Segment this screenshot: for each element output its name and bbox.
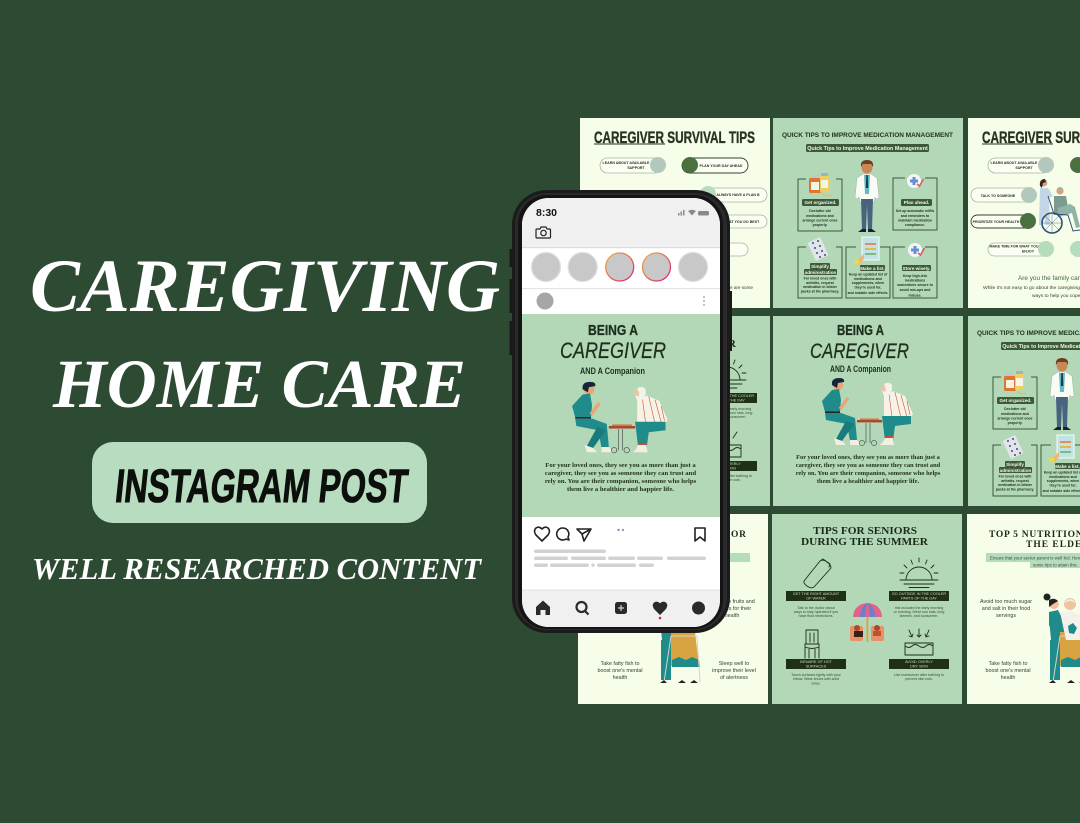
tip: store wisely: medications <box>905 278 925 282</box>
tip: water: have fluid restrictions. <box>799 614 833 618</box>
panel: summer tips, column 1 partial: this includes the early morning <box>703 407 751 411</box>
tip: water: OF WATER <box>806 596 826 600</box>
icon: cake <box>713 431 741 457</box>
post: being a caregiver: rely on. You are their companion, someone who helps <box>545 478 697 485</box>
post: being a caregiver: caregiver, they see you as someone they can trust and <box>545 470 696 477</box>
tip text <box>980 599 1032 681</box>
tip: plan ahead: and reminders to <box>901 214 929 218</box>
intro text <box>983 275 1080 299</box>
tip: hot surfaces: BEWARE OF HOT <box>800 660 833 664</box>
tip: simplify administration: For loved ones with <box>804 276 836 280</box>
tip: store wisely: somewhere secure to <box>897 283 933 287</box>
tip: dry skin <box>889 629 949 681</box>
tip pills: SUPPORT <box>1015 166 1033 170</box>
tip: get organized: arrange current ones <box>997 416 1033 420</box>
body text: caregiver, they see you as someone they can trust and <box>796 462 941 469</box>
panel: nutrition tips, column 1: veggies for their <box>713 606 751 612</box>
tip: simplify administration: Simplify <box>1006 462 1024 467</box>
tip: water: GET THE RIGHT AMOUNT <box>793 592 840 596</box>
tip pills: PRIORITIZE YOUR HEALTH <box>973 220 1020 224</box>
tip pills: LEARN ABOUT AVAILABLE <box>991 161 1038 165</box>
tip: plan ahead: maintain medication <box>898 218 932 222</box>
tip: get organized: medications and <box>1001 412 1029 416</box>
tip: simplify administration: arthritis, request <box>806 281 835 285</box>
panel: summer tips, column 1 partial: Use moisturizer after bathing to <box>702 474 752 478</box>
tip: simplify administration <box>798 237 842 298</box>
panel heading: QUICK TIPS TO IMPROVE MEDICATION MANAGEMENT <box>782 132 954 139</box>
subheading pill: Quick Tips to Improve Medication Management <box>807 146 928 152</box>
illustration: caregiver and elder <box>822 378 913 446</box>
panel: summer tips, column 1 partial: DURING THE SUMMER <box>609 338 736 350</box>
phone side buttons <box>510 249 732 355</box>
tip: hot surfaces: Touch surfaces lightly with your <box>791 673 842 677</box>
tip: hot surfaces: soles. <box>811 682 821 686</box>
tip: make a list <box>846 237 890 298</box>
tip: get organized: properly. <box>813 223 827 227</box>
tip: sun: this includes the early morning <box>895 606 943 610</box>
panel: summer tips, column 1 partial: PARTS OF THE DAY <box>709 398 745 402</box>
tip: store wisely <box>893 243 937 298</box>
tip pills: ENJOY <box>1022 250 1035 254</box>
phone <box>510 190 732 633</box>
tip: hot surfaces <box>786 630 846 686</box>
panel: nutrition tips, column 1: Take fatty fish to <box>601 661 639 667</box>
tip: hot surfaces: elbow. Wear shoes with solid <box>793 677 839 681</box>
tip: make a list: they're used for, <box>855 285 881 289</box>
icon: doctor <box>855 160 879 232</box>
tip: store wisely: avoid mix-ups and <box>900 288 930 292</box>
post: being a caregiver: BEING A <box>588 322 638 339</box>
tip: sun: GO OUTSIDE IN THE COOLER <box>892 592 946 596</box>
tip: get organized: Get organized. <box>1000 398 1031 403</box>
tip: simplify administration: packs at the pharmacy. <box>801 290 839 294</box>
status and top bar: 8:30 <box>536 207 557 219</box>
illustration: couple under umbrella <box>850 603 884 642</box>
panel: summer tips, column 1 partial: GO OUTSIDE IN THE COOLER <box>700 394 754 398</box>
panel: being a caregiver: CAREGIVER <box>810 340 909 363</box>
panel: caregiver survival tips, column 1: LEARN ABOUT AVAILABLE <box>603 161 650 165</box>
post: being a caregiver: CAREGIVER <box>560 338 666 363</box>
tip: store wisely: misuse. <box>908 294 922 298</box>
tip: dry skin: prevent skin cuts. <box>905 677 933 681</box>
panel: caregiver survival tips, column 3 <box>968 118 1080 308</box>
panel heading: DURING THE SUMMER <box>801 536 928 548</box>
bottom navigation <box>522 590 720 627</box>
tip: sun: or evening. Wear sun hats, long <box>894 610 944 614</box>
tip: sun: sleeves, and sunscreen. <box>900 614 938 618</box>
tip pills <box>971 157 1080 257</box>
panel: nutrition tips, column 1: Ensure that your senior parent is well fed. Here are <box>623 556 723 560</box>
panel: medication tips, column 3 <box>968 316 1080 506</box>
badge: instagram post: INSTAGRAM POST <box>113 459 411 512</box>
panel: summer tips, column 1 partial: AVOID OVERLY <box>713 462 741 466</box>
panel: summer tips, column 1 partial: prevent skin cuts. <box>713 478 741 482</box>
panel: being a caregiver <box>773 316 963 506</box>
tip: sun <box>889 558 949 618</box>
subtitle: WELL RESEARCHED CONTENT <box>32 552 482 586</box>
tip: make a list: Make a list. <box>860 266 885 271</box>
panel: summer tips, column 1 partial: DRY SKIN <box>718 466 736 470</box>
panel heading: BEING A <box>837 323 884 339</box>
body text: For your loved ones, they see you as more than just a <box>796 454 941 461</box>
tip: water: Talk to the doctor about <box>797 606 835 610</box>
illustration: nurse with walker <box>660 614 700 683</box>
tip: simplify administration: medication in blister <box>803 285 838 289</box>
tip: simplify administration: medication in blister <box>998 483 1033 487</box>
panel: caregiver survival tips, column 1: DO WHAT YOU DO BEST <box>717 220 760 224</box>
tip: get organized: medications and <box>806 214 834 218</box>
post: being a caregiver <box>522 314 720 517</box>
tip: store wisely: Store wisely. <box>903 266 930 271</box>
tip text: Avoid too much sugar <box>980 599 1032 605</box>
badge: instagram post <box>92 442 427 523</box>
tip: water <box>786 559 846 618</box>
panel: caregiver survival tips, column 1 <box>580 118 770 308</box>
panel heading <box>801 525 928 548</box>
post: being a caregiver: AND A Companion <box>580 366 645 377</box>
tip: store wisely: Keep high-risk <box>903 274 927 278</box>
phone screen <box>522 198 720 627</box>
panel heading: CAREGIVER SURVIVAL TIPS <box>594 128 755 147</box>
icon: camera <box>536 227 550 238</box>
tip: make a list: supplements, when <box>852 281 884 285</box>
post: being a caregiver: them live a healthier and happier life. <box>567 486 674 493</box>
tip: get organized: Declutter old <box>809 209 831 213</box>
panel: nutrition tips, column 1: health <box>725 613 739 619</box>
tip: dry skin: Use moisturizer after bathing to <box>894 673 944 677</box>
tip: make a list: they're used for, <box>1050 483 1076 487</box>
tip: water: ways to stay hydrated if you <box>794 610 838 614</box>
tip: simplify administration <box>993 435 1037 496</box>
tip: dry skin: AVOID OVERLY <box>905 660 933 664</box>
panel: nutrition tips, column 1: boost one's mental <box>597 668 643 674</box>
tip: plan ahead <box>893 174 937 230</box>
phone frame <box>512 190 730 633</box>
tip text: boost one's mental <box>985 668 1031 674</box>
panel heading <box>989 530 1080 550</box>
tip pills: TALK TO SOMEONE <box>981 194 1016 198</box>
panel: being a caregiver: AND A Companion <box>830 364 891 374</box>
panel: summer tips, column 1 partial: or evening. Wear sun hats, long <box>702 411 752 415</box>
tip: get organized <box>993 371 1037 429</box>
panel: caregiver survival tips, column 1: ALWAYS HAVE A PLAN B <box>716 193 760 197</box>
tip: simplify administration: For loved ones with <box>999 474 1031 478</box>
caption placeholder bars <box>534 550 706 567</box>
tip text: servings <box>996 613 1016 619</box>
tip: get organized: properly. <box>1008 421 1022 425</box>
tip: get organized: Get organized. <box>805 200 836 205</box>
panel: tips for seniors <box>772 514 962 704</box>
illustration: nurse and wheelchair <box>1039 179 1080 233</box>
panel: nutrition tips, column 1 <box>578 514 768 704</box>
body text: rely on. You are their companion, someone who helps <box>796 470 941 477</box>
tip: simplify administration: administration <box>1000 468 1032 473</box>
tip: simplify administration: packs at the pharmacy. <box>996 488 1034 492</box>
post action icons <box>534 527 705 541</box>
tip: sun: PARTS OF THE DAY <box>901 596 937 600</box>
icon: sun <box>708 358 746 388</box>
tip: make a list: and notable side effects. <box>848 291 888 295</box>
panel: nutrition tips, column 1: Sleep well to <box>719 661 749 667</box>
tip: get organized <box>798 173 842 231</box>
panel: summer tips, column 1 partial: sleeves, and sunscreen. <box>708 415 746 419</box>
panel: nutrition tips, column 1: improve their level <box>712 668 756 674</box>
tip: get organized: arrange current ones <box>802 218 838 222</box>
post: being a caregiver: For your loved ones, they see you as more than just a <box>545 462 696 469</box>
tip: hot surfaces: SURFACES <box>806 664 827 668</box>
tip: simplify administration: arthritis, request <box>1001 479 1030 483</box>
intro band: some tips to attain this. <box>1033 562 1078 568</box>
icon: doctor <box>1050 358 1074 430</box>
panel heading: TIPS FOR SENIORS <box>813 525 917 537</box>
tip: make a list: supplements, when <box>1047 479 1079 483</box>
panel: summer tips, column 1 partial <box>580 316 770 506</box>
panel: caregiver survival tips, column 1: SUPPORT <box>627 166 645 170</box>
tip: plan ahead: compliance. <box>905 223 925 227</box>
tip: plan ahead: Set up automatic refills <box>896 209 934 213</box>
panel: nutrition tips, column 1: health <box>613 675 627 681</box>
body text <box>796 454 941 485</box>
panel: nutrition tips, column 1: Eat more fruits and <box>709 599 755 605</box>
tip: make a list: medications and <box>854 277 882 281</box>
post header <box>536 292 705 310</box>
panel: medication tips <box>773 118 963 308</box>
panel: nutrition tips, column 3 <box>967 514 1080 704</box>
panel: nutrition tips, column 1: TOP 5 NUTRITION TIPS FOR <box>600 530 747 540</box>
tip: get organized: Declutter old <box>1004 407 1026 411</box>
tip text: and salt in their food <box>982 606 1030 612</box>
tip: simplify administration: Simplify <box>811 264 829 269</box>
panel: caregiver survival tips, column 1: there are some <box>722 285 753 290</box>
tip text: health <box>1001 675 1015 681</box>
title: caregiving: CAREGIVING <box>30 245 500 328</box>
tip: make a list: Keep an updated list of <box>849 272 888 276</box>
title: home care: HOME CARE <box>52 346 466 422</box>
tip pills: MAKE TIME FOR WHAT YOU <box>990 244 1039 248</box>
status and top bar <box>522 198 720 248</box>
tip: plan ahead: Plan ahead. <box>904 200 929 205</box>
tip text: Take fatty fish to <box>989 661 1027 667</box>
intro band <box>986 553 1080 568</box>
stories row <box>522 252 720 289</box>
tip: make a list: Make a list. <box>1055 464 1080 469</box>
tip: make a list <box>1041 435 1080 496</box>
tip: simplify administration: administration <box>805 270 837 275</box>
panel: nutrition tips, column 1: of alertness <box>720 675 748 681</box>
illustration: nurse with elder <box>1044 594 1080 683</box>
tip: dry skin: DRY SKIN <box>910 664 928 668</box>
body text: them live a healthier and happier life. <box>817 478 919 485</box>
panel: caregiver survival tips, column 1: PLAN YOUR DAY AHEAD <box>700 164 743 168</box>
tip: make a list: medications and <box>1049 475 1077 479</box>
